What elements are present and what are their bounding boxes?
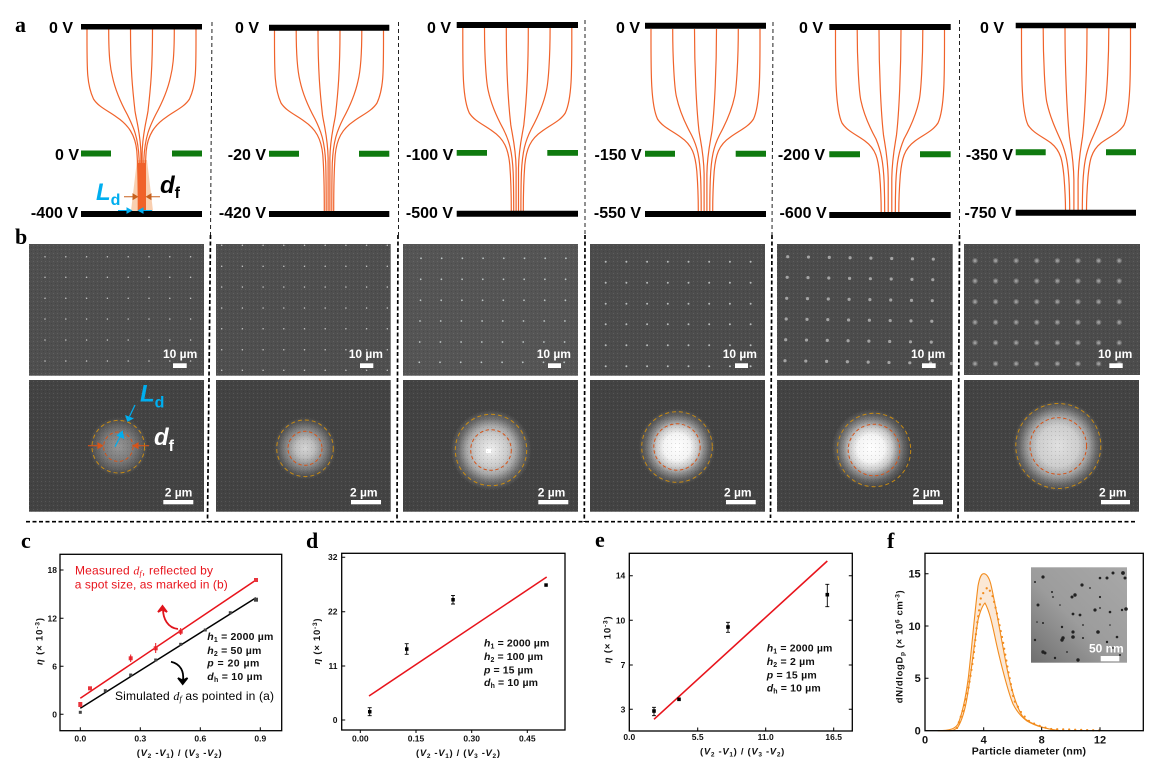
parameters: d: [767, 683, 774, 695]
parameters: = 2000 µm: [495, 638, 549, 650]
y tick labels: 12: [48, 613, 57, 623]
frame: [629, 553, 852, 731]
scale bar: [351, 500, 381, 504]
y tick labels: [48, 565, 57, 719]
voltage middle: -200 V: [778, 147, 825, 164]
arrows: df: [124, 194, 160, 199]
electron trajectories: [463, 28, 572, 211]
x axis title: 3: [758, 751, 762, 758]
array image: [777, 244, 953, 376]
electron trajectories: [87, 29, 196, 211]
parameters: = 100 µm: [494, 651, 543, 663]
x axis title: V: [486, 748, 493, 759]
y axis title: ): [35, 618, 46, 621]
x axis title: Particle diameter (nm): [972, 745, 1086, 757]
voltage bottom: -550 V: [594, 205, 641, 222]
green electrodes: [1016, 149, 1136, 155]
y tick labels: [616, 571, 626, 714]
x axis title: ): [497, 748, 500, 759]
ticks: [629, 576, 852, 731]
y axis title: (× 10: [895, 624, 906, 651]
voltage bottom: -600 V: [780, 205, 827, 222]
measured annotation: f: [140, 569, 144, 578]
parameters: h: [484, 638, 490, 650]
parameters: h: [207, 631, 214, 643]
Ld label: L: [96, 179, 111, 206]
y tick labels: 7: [621, 660, 626, 670]
x axis title: ) / (: [450, 748, 467, 759]
y tick labels: 14: [616, 571, 626, 581]
panel b5: micrographs: [777, 244, 953, 512]
df label: f: [169, 438, 175, 455]
shaded distribution band: [938, 574, 1060, 731]
parameters: = 2000 µm: [777, 643, 832, 655]
scale bar: [1101, 500, 1130, 504]
black curved arrow: [171, 662, 188, 684]
x axis title: 2: [711, 751, 715, 758]
panel a1: trajectories at -400 V: [31, 20, 202, 222]
x axis title: ): [219, 748, 222, 759]
x axis title: 2: [148, 753, 152, 760]
x tick labels: 4: [981, 734, 988, 746]
arrows: Ld: [115, 405, 135, 447]
spot image: [964, 380, 1139, 512]
parameters: 1: [773, 649, 777, 656]
Ld label: d: [111, 192, 120, 209]
spot image: [777, 380, 952, 512]
voltage middle: -350 V: [966, 147, 1013, 164]
inset micrograph: [1031, 567, 1128, 663]
fit line: [654, 561, 827, 719]
measured annotation: a spot size, as marked in (b): [75, 577, 228, 591]
x axis title: 1: [166, 753, 170, 760]
focus cone shading: [131, 160, 153, 211]
scale label: 2 µm: [350, 486, 378, 500]
parameters: d: [207, 671, 214, 683]
parameters: h: [767, 656, 773, 668]
scale bar: [173, 363, 187, 368]
y axis title: ): [895, 590, 906, 593]
black fit line: [80, 598, 256, 708]
parameters: 1: [491, 644, 495, 651]
scale bar: [913, 500, 943, 504]
scale bar: [360, 363, 373, 368]
error bars: [652, 584, 829, 716]
parameters: p = 15 µm: [766, 669, 817, 681]
x axis title: V: [188, 748, 195, 759]
panel label b: b: [15, 224, 27, 249]
spot image: [29, 380, 204, 512]
panel f: chart: [887, 528, 1143, 757]
scale label: 2 µm: [1099, 486, 1127, 500]
y tick labels: 10: [616, 615, 626, 625]
parameters: 1: [214, 637, 218, 644]
parameters: = 10 µm: [778, 683, 821, 695]
x tick labels: 0.3: [134, 734, 146, 744]
x axis title: 2: [214, 753, 218, 760]
voltage middle: -100 V: [406, 147, 454, 164]
y tick labels: 3: [621, 704, 626, 714]
focus core: [138, 163, 146, 211]
parameters: [766, 643, 832, 696]
panel e: chart: [595, 527, 852, 758]
electron trajectories: [274, 30, 384, 211]
y axis title: -3: [895, 594, 902, 601]
x axis title: 3: [474, 753, 478, 760]
x axis title: ) / (: [171, 748, 189, 759]
parameters: h: [484, 651, 490, 663]
scale label: 10 µm: [537, 347, 571, 361]
scale bar: [1109, 363, 1123, 368]
ticks: [342, 557, 527, 733]
parameters: 2: [214, 651, 218, 658]
parameters: [206, 631, 273, 684]
panel b6: micrographs: [964, 244, 1140, 512]
array image: [403, 244, 578, 376]
green electrodes: [645, 151, 766, 157]
green electrodes: [269, 151, 389, 157]
frame: [342, 553, 565, 730]
scale label: 2 µm: [724, 486, 752, 500]
electrodes: [457, 22, 578, 217]
electron trajectories: [1021, 28, 1131, 210]
x tick labels: 0.30: [463, 734, 480, 744]
parameters: h: [767, 643, 773, 655]
parameters: 2: [491, 657, 495, 664]
voltage bottom: -500 V: [406, 205, 453, 222]
x axis title: V: [751, 746, 758, 757]
y tick labels: 0: [915, 726, 921, 738]
top electrode: [81, 24, 202, 30]
y axis title: -3: [603, 620, 610, 627]
parameters: = 10 µm: [219, 671, 262, 683]
panel a3: trajectories at -500 V: [406, 20, 578, 222]
scale label: 2 µm: [538, 486, 565, 500]
voltage top: 0 V: [235, 20, 259, 37]
scale bar: [538, 500, 568, 504]
simulated annotation: as pointed in (a): [182, 689, 274, 703]
y axis title: η (× 10: [35, 630, 46, 665]
voltage top: 0 V: [616, 20, 640, 37]
x axis title: ): [781, 746, 784, 757]
electrodes: [1016, 23, 1136, 216]
array image: [590, 244, 765, 376]
simulated annotation: Simulated d: [115, 689, 179, 703]
y axis title: 6: [895, 619, 902, 623]
voltage bottom: -420 V: [219, 205, 266, 222]
panel d: chart: [306, 528, 565, 760]
array image: [964, 244, 1140, 375]
x tick labels: 16.5: [825, 732, 842, 742]
x axis title: 2: [427, 753, 431, 760]
voltage top: 0 V: [49, 20, 73, 37]
inset scale label: 50 nm: [1089, 642, 1124, 656]
y tick labels: [908, 568, 921, 738]
x axis title: (V: [700, 746, 710, 757]
scale bar: [163, 500, 193, 504]
y tick labels: 22: [328, 607, 338, 617]
x tick labels: 0.0: [74, 734, 86, 744]
x tick labels: [922, 734, 1106, 746]
frame: [925, 553, 1143, 731]
x axis title: 3: [196, 753, 200, 760]
scale bar: [726, 500, 756, 504]
parameters: = 10 µm: [495, 677, 538, 689]
parameters: = 50 µm: [218, 645, 261, 657]
x tick labels: 0.9: [254, 734, 266, 744]
parameters: d: [484, 677, 491, 689]
frame: [60, 554, 282, 731]
x tick labels: 5.5: [692, 732, 704, 742]
y tick labels: 10: [908, 621, 921, 633]
voltage middle: -150 V: [595, 147, 642, 164]
measured annotation: Measured d: [75, 563, 139, 577]
y axis title: ): [603, 616, 614, 619]
x axis title: (V: [137, 748, 147, 759]
panel a2: trajectories at -420 V: [219, 20, 389, 222]
simulated annotation: f: [179, 694, 183, 704]
y tick labels: 32: [328, 552, 338, 562]
arrows: df: [88, 443, 149, 448]
scale label: 2 µm: [913, 486, 940, 500]
scale label: 10 µm: [163, 347, 197, 361]
x axis title: V: [722, 746, 729, 757]
x tick labels: [352, 734, 536, 744]
x tick labels: 8: [1039, 734, 1045, 746]
x axis title: -: [763, 746, 769, 757]
parameters: = 2000 µm: [218, 631, 273, 643]
y tick labels: 5: [915, 673, 921, 685]
parameters: p = 20 µm: [206, 658, 259, 670]
column dividers (upper): [210, 20, 960, 235]
parameters: 2: [773, 662, 777, 669]
measured annotation: , reflected by: [142, 563, 213, 577]
parameters: = 2 µm: [777, 656, 815, 668]
scale bar: [548, 363, 561, 368]
y axis title: η (× 10: [603, 628, 614, 663]
simulated points: [79, 598, 258, 714]
red fit line: [80, 580, 256, 698]
label: c: [21, 528, 31, 553]
x axis title: V: [770, 746, 777, 757]
y tick labels: 18: [48, 565, 57, 575]
voltage top: 0 V: [427, 20, 451, 37]
df label: f: [175, 185, 181, 202]
x tick labels: 0.15: [408, 734, 425, 744]
y axis title: η (× 10: [312, 630, 323, 664]
x axis title: 2: [493, 753, 497, 760]
column and row dividers (lower): [26, 235, 1137, 522]
y tick labels: 11: [328, 661, 338, 671]
arrows: Ld: [118, 208, 152, 213]
y axis title: dN/dlogD: [895, 657, 906, 703]
panel a4: trajectories at -550 V: [594, 20, 766, 222]
label: d: [306, 528, 318, 553]
measured points: [78, 578, 258, 707]
x axis title: V: [207, 748, 214, 759]
x tick labels: 0.00: [352, 734, 369, 744]
scale label: 10 µm: [723, 347, 757, 361]
x tick labels: [74, 734, 266, 744]
x axis title: (V: [416, 748, 426, 759]
panel a6: trajectories at -750 V: [965, 20, 1136, 222]
electrodes: [269, 25, 389, 217]
bottom electrode: [81, 211, 202, 217]
voltage middle: -20 V: [228, 147, 266, 164]
spot image: [403, 380, 578, 512]
voltage bottom: -750 V: [965, 205, 1012, 222]
y axis title: -3: [312, 622, 319, 629]
label: f: [887, 528, 895, 553]
voltage top: 0 V: [980, 20, 1004, 37]
y axis title: ): [312, 618, 323, 622]
scale label: 10 µm: [911, 347, 945, 361]
ticks: [925, 574, 1100, 731]
electrodes: [829, 24, 951, 218]
df label: d: [160, 172, 175, 199]
y tick labels: 6: [52, 661, 57, 671]
parameters: h: [491, 683, 495, 690]
panel c: chart: [21, 528, 282, 760]
green electrodes: [457, 150, 578, 156]
fit line: [369, 577, 547, 696]
x tick labels: 12: [1094, 734, 1106, 746]
y tick labels: [328, 552, 338, 725]
panel b4: micrographs: [590, 244, 765, 512]
red curved arrow: [158, 606, 178, 629]
scale label: 10 µm: [349, 347, 383, 361]
x tick labels: [623, 732, 842, 742]
measured annotation: [75, 563, 228, 591]
x axis title: -: [715, 746, 722, 757]
x axis title: V: [438, 748, 445, 759]
x axis title: -: [200, 748, 206, 759]
df label: d: [154, 424, 169, 451]
scale label: 2 µm: [165, 486, 192, 500]
x tick labels: 0.6: [194, 734, 206, 744]
label: e: [595, 527, 605, 552]
x axis title: ) / (: [734, 746, 751, 757]
x axis title: -: [478, 748, 485, 759]
x axis title: -: [152, 748, 159, 759]
x axis title: V: [467, 748, 474, 759]
parameters: p = 15 µm: [483, 664, 533, 676]
left green electrode: [81, 150, 111, 156]
y tick labels: 15: [908, 568, 921, 580]
data points: [652, 593, 829, 713]
parameters: h: [214, 677, 218, 684]
ticks: [60, 570, 260, 731]
electrodes: [645, 23, 766, 217]
panel b2: micrographs: [216, 244, 391, 512]
inset scale bar: [1101, 656, 1119, 661]
x tick labels: 11.0: [758, 732, 774, 742]
parameters: h: [773, 689, 778, 696]
Ld label: d: [155, 395, 164, 412]
x axis title: 1: [729, 751, 733, 758]
y axis title: cm: [895, 601, 906, 619]
parameters: [483, 638, 549, 690]
scale bar: [735, 363, 748, 368]
scale bar: [922, 363, 936, 368]
panel a5: trajectories at -600 V: [778, 20, 951, 222]
panel b3: micrographs: [403, 244, 578, 512]
electron trajectories: [835, 30, 945, 212]
right green electrode: [172, 150, 202, 156]
scale label: 10 µm: [1098, 347, 1132, 361]
array image: [216, 244, 391, 376]
panel b1: micrographs: [29, 244, 204, 512]
y axis title: p: [900, 652, 907, 656]
error bars: [368, 595, 455, 716]
array image: [29, 244, 204, 376]
y axis title: -3: [35, 622, 42, 629]
electron trajectories: [651, 29, 760, 211]
x tick labels: 0.45: [519, 734, 536, 744]
x axis title: V: [159, 748, 166, 759]
parameters: h: [207, 645, 214, 657]
panel label a: a: [15, 12, 26, 37]
x axis title: 2: [777, 751, 781, 758]
mean data points: [957, 587, 1100, 730]
Ld label: L: [140, 381, 155, 408]
y tick labels: 0: [52, 709, 57, 719]
data points: [368, 583, 548, 714]
x axis title: 1: [445, 753, 449, 760]
green electrodes: [829, 151, 951, 157]
voltage middle: 0 V: [55, 147, 79, 164]
spot image: [216, 380, 391, 512]
x tick labels: 0: [922, 734, 928, 746]
x axis title: -: [431, 748, 438, 759]
y tick labels: 0: [333, 715, 338, 725]
voltage bottom: -400 V: [31, 205, 78, 222]
spot image: [590, 380, 765, 512]
voltage top: 0 V: [799, 20, 823, 37]
x tick labels: 0.0: [623, 732, 635, 742]
